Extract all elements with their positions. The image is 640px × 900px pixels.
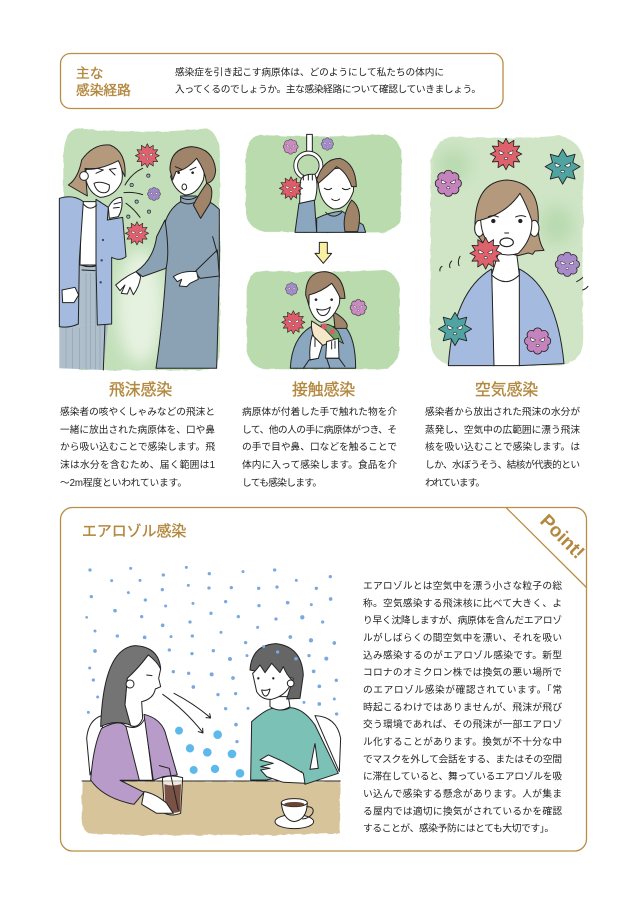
column: airborne infection: われています。 [425, 477, 485, 489]
column: contact infection [242, 381, 397, 489]
virus: pink bottom [525, 328, 551, 354]
column: airborne infection: 核を吸い込むことで感染します。は [425, 440, 580, 453]
virus: red top [490, 138, 522, 170]
intro heading: 感染経路 [76, 82, 131, 98]
column: contact infection: 体内に入って感染します。食品を介 [242, 458, 397, 471]
aerosol text: ル化することがあります。換気が不十分な中 [363, 735, 562, 748]
aerosol text: 時起こるわけではありませんが、飛沫が飛び [363, 700, 562, 713]
aerosol text: 交う環境であれば、その飛沫が一部エアロゾ [363, 718, 562, 731]
intro text: 入ってくるのでしょうか。主な感染経路について確認していきましょう。 [175, 82, 481, 96]
aerosol text: ルがしばらくの間空気中を漂い、それを吸い [363, 631, 562, 644]
aerosol text: でマスクを外して会話をする、またはその空間 [363, 752, 562, 765]
motion marks [440, 256, 588, 290]
column: contact infection: して、他の人の手に病原体がつき、そ [242, 423, 397, 436]
aerosol text: る屋内では適切に換気がされているかを確認 [363, 804, 562, 817]
virus: red top [279, 177, 303, 200]
virus: red [135, 144, 159, 168]
virus: purple bottom [285, 283, 298, 295]
floating particles [85, 566, 338, 743]
aerosol text: い込んで感染する懸念があります。人が集ま [363, 787, 562, 800]
aerosol text: することが、感染予防にはとても大切です」。 [363, 822, 554, 835]
coughing person [59, 145, 126, 370]
breath arrows [163, 693, 211, 733]
column: droplet infection: 飛沫感染 [109, 381, 172, 399]
column: airborne infection: 感染者から放出された飛沫の水分が [425, 405, 580, 418]
point label: Point! [535, 511, 588, 564]
column: airborne infection: 蒸発し、空気中の広範囲に漂う飛沫 [425, 423, 580, 436]
column: contact infection: の手で目や鼻、口などを触ることで [242, 440, 397, 453]
column: droplet infection: 一緒に放出された病原体を、口や鼻 [60, 423, 215, 436]
large particles [175, 727, 244, 778]
column: droplet infection: 感染者の咳やくしゃみなどの飛沫と [60, 405, 215, 418]
column: contact infection: 接触感染 [292, 381, 355, 399]
column: contact infection: 病原体が付着した手で触れた物を介 [242, 405, 397, 418]
virus: red lower [125, 222, 149, 245]
illustration: droplet infection [59, 128, 220, 370]
column: droplet infection: 〜2m程度といわれています。 [60, 476, 187, 489]
eating person [290, 272, 356, 368]
virus: pink top [283, 139, 298, 154]
virus: teal top [545, 149, 580, 184]
left woman [87, 646, 177, 804]
column: droplet infection: 沫は水分を含むため、届く範囲は1 [60, 458, 215, 471]
aerosol text: コロナのオミクロン株では換気の悪い場所で [363, 666, 562, 679]
virus: red bottom [282, 311, 305, 334]
intro panel [60, 54, 503, 108]
coffee cup [275, 799, 314, 829]
intro heading: 主な [76, 66, 103, 81]
aerosol text: のエアロゾル感染が確認されています。「常 [363, 683, 562, 696]
panel: aerosol infection [60, 508, 588, 851]
virus: purple [147, 187, 161, 201]
virus: teal bottom [438, 312, 472, 346]
illustration: aerosol [82, 566, 341, 835]
aerosol text: 込み感染するのがエアロゾル感染です。新型 [363, 648, 562, 661]
aerosol heading: エアロゾル感染 [82, 523, 186, 540]
column: droplet infection: から吸い込むことで感染します。飛 [60, 440, 215, 453]
illustration: airborne infection [430, 136, 588, 366]
arrow [315, 242, 332, 263]
intro text [175, 66, 481, 96]
droplets [124, 168, 151, 218]
aerosol text: り早く沈降しますが、病原体を含んだエアロゾ [363, 614, 562, 627]
column: airborne infection [425, 381, 580, 489]
column: airborne infection: 空気感染 [475, 381, 538, 399]
iced drink [142, 766, 183, 815]
virus: pink bottom [350, 299, 367, 316]
listening person [116, 147, 219, 368]
column: contact infection: しても感染します。 [242, 476, 322, 489]
breathing person [448, 180, 564, 366]
right woman [250, 644, 341, 784]
virus: red at mouth [470, 237, 501, 269]
virus: violet right [555, 252, 579, 276]
intro heading [76, 66, 131, 98]
aerosol text: 称。空気感染する飛沫核に比べて大きく、よ [363, 596, 562, 609]
virus: pink left [435, 170, 461, 196]
intro text: 感染症を引き起こす病原体は、どのようにして私たちの体内に [175, 66, 444, 78]
virus: purple top [321, 138, 334, 150]
table [82, 782, 341, 835]
aerosol text: エアロゾルとは空気中を漂う小さな粒子の総 [363, 579, 562, 592]
column: droplet infection [60, 381, 215, 489]
strap passenger [295, 134, 366, 232]
column: airborne infection: しか、水ぼうそう、結核が代表的とい [425, 458, 580, 471]
illustration: contact infection [246, 134, 402, 369]
aerosol text [363, 579, 562, 835]
point ribbon line [506, 508, 586, 588]
aerosol text: に滞在していると、舞っているエアロゾルを吸 [363, 770, 562, 783]
